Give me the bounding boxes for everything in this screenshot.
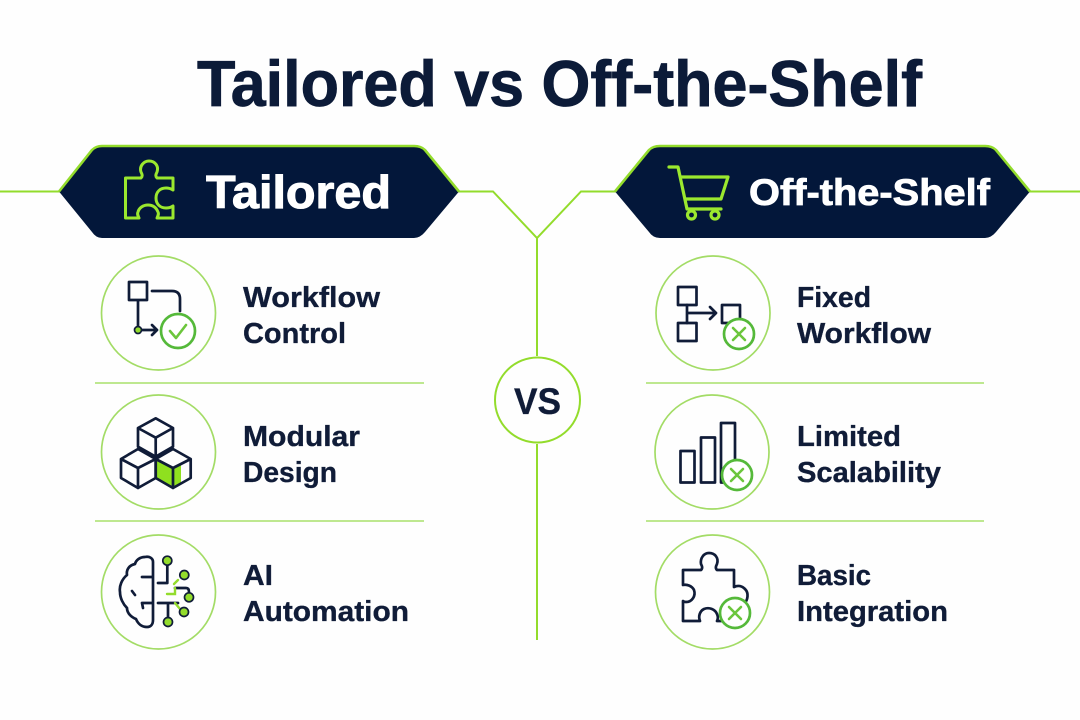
label: Modular bbox=[243, 421, 360, 453]
icon: cubes bbox=[102, 395, 216, 509]
label line 2: Design bbox=[243, 457, 337, 489]
panel: off-the-shelf bbox=[615, 145, 1030, 649]
label: Basic bbox=[797, 560, 871, 592]
icon: brain circuit bbox=[102, 535, 216, 649]
label: Workflow bbox=[243, 282, 380, 314]
feature: limited scalability bbox=[655, 395, 941, 509]
vs badge bbox=[495, 358, 580, 442]
icon: puzzle with x bbox=[656, 535, 770, 649]
connector lines bbox=[0, 192, 1080, 640]
label line 2: Integration bbox=[797, 596, 948, 628]
feature: basic integration bbox=[656, 535, 948, 649]
label line 2: Workflow bbox=[797, 318, 931, 350]
feature: workflow control bbox=[102, 256, 380, 370]
tailored heading: Tailored bbox=[206, 166, 391, 218]
off-the-shelf heading: Off-the-Shelf bbox=[749, 172, 991, 213]
feature: fixed workflow bbox=[656, 256, 931, 370]
tailored header banner bbox=[59, 145, 459, 238]
label line 2: Control bbox=[243, 318, 346, 350]
panel: tailored bbox=[59, 145, 459, 649]
label: AI bbox=[243, 560, 273, 592]
icon: workflow with check bbox=[102, 256, 216, 370]
off-the-shelf header banner bbox=[615, 145, 1030, 238]
label line 2: Automation bbox=[243, 596, 409, 628]
label: Limited bbox=[797, 421, 901, 453]
label line 2: Scalability bbox=[797, 457, 941, 489]
label: Fixed bbox=[797, 282, 871, 314]
icon: fixed workflow with x bbox=[656, 256, 770, 370]
icon: bars with x bbox=[655, 395, 769, 509]
feature: modular design bbox=[102, 395, 360, 509]
title: Tailored vs Off-the-Shelf bbox=[197, 47, 922, 120]
icon: shopping cart bbox=[669, 167, 728, 219]
vs badge: VS bbox=[514, 381, 561, 422]
icon: puzzle piece bbox=[126, 161, 173, 218]
feature: ai automation bbox=[102, 535, 409, 649]
